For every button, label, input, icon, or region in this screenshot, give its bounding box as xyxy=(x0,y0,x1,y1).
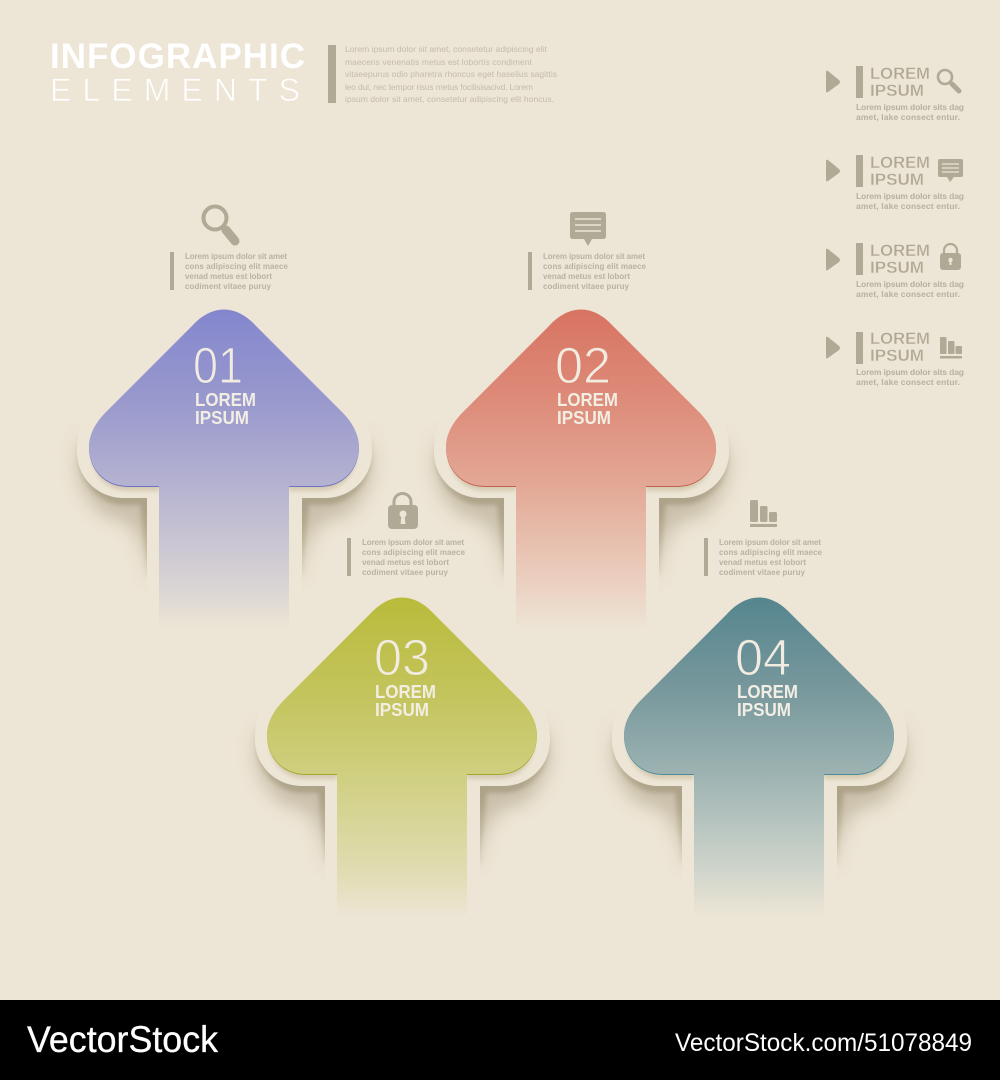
sidebar bar 2 xyxy=(856,155,863,187)
sidebar item 2 xyxy=(826,153,964,211)
arrow 03 label: LOREM xyxy=(375,682,436,702)
sidebar heading 4: LOREM xyxy=(870,329,930,348)
callout text 4: codiment vitaee puruy xyxy=(719,568,806,577)
intro paragraph: maecens venenatis metus est lobortis condiment xyxy=(345,57,533,67)
sidebar bar 4 xyxy=(856,332,863,364)
arrow 04 label: IPSUM xyxy=(737,700,791,720)
sidebar heading 2: LOREM xyxy=(870,153,930,172)
callout text 1: Lorem ipsum dolor sit amet xyxy=(185,252,287,261)
intro paragraph: ipsum dolor sit amet, consetetur adipiscing elit honcus. xyxy=(345,94,554,104)
callout text 3: codiment vitaee puruy xyxy=(362,568,449,577)
sidebar heading 2 xyxy=(870,153,930,189)
callout text 4: Lorem ipsum dolor sit amet xyxy=(719,538,821,547)
callout 2 xyxy=(528,212,647,291)
callout text 1: cons adipiscing elit maece xyxy=(185,262,289,271)
arrow 01 label: IPSUM xyxy=(195,408,249,428)
sidebar text 3: amet, lake consect entur. xyxy=(856,289,960,299)
callout text 1: venad metus est lobort xyxy=(185,272,272,281)
sidebar heading 4: IPSUM xyxy=(870,346,924,365)
intro paragraph: Lorem ipsum dolor sit amet, consetetur adipiscing elit xyxy=(345,44,548,54)
sidebar item 1 xyxy=(826,64,964,122)
callout text 4 xyxy=(719,538,823,577)
intro paragraph xyxy=(345,44,557,104)
sidebar heading 4 xyxy=(870,329,930,365)
arrow 02 label: IPSUM xyxy=(557,408,611,428)
title divider bar xyxy=(328,45,336,103)
sidebar text 1 xyxy=(856,102,964,122)
title: INFOGRAPHIC xyxy=(50,37,305,76)
sidebar text 1: Lorem ipsum dolor sits dag xyxy=(856,102,964,112)
callout 1 xyxy=(170,206,289,291)
intro paragraph: leo dui, nec tempor risus metus focilisisacivd. Lorem xyxy=(345,82,533,92)
callout text 1 xyxy=(185,252,289,291)
callout text 3: cons adipiscing elit maece xyxy=(362,548,466,557)
sidebar text 2 xyxy=(856,191,964,211)
callout text 4: venad metus est lobort xyxy=(719,558,806,567)
icon: padlock small xyxy=(940,244,961,270)
icon: speech bubble xyxy=(570,212,606,246)
arrow 02 label xyxy=(555,337,618,428)
arrow 03 label: IPSUM xyxy=(375,700,429,720)
arrow 02 label: 02 xyxy=(555,337,611,394)
sidebar item 3 xyxy=(826,241,964,299)
footer url: VectorStock.com/51078849 xyxy=(675,1029,972,1057)
callout text 2: codiment vitaee puruy xyxy=(543,282,630,291)
callout text 4: cons adipiscing elit maece xyxy=(719,548,823,557)
arrow 02 xyxy=(432,300,732,632)
sidebar pointer 1 xyxy=(826,71,840,92)
arrow 04 xyxy=(610,588,910,920)
icon: speech bubble small xyxy=(938,159,963,182)
callout text 3 xyxy=(362,538,466,577)
sidebar text 4: amet, lake consect entur. xyxy=(856,377,960,387)
sidebar text 2: amet, lake consect entur. xyxy=(856,201,960,211)
title xyxy=(50,37,305,108)
arrow 01 label: 01 xyxy=(193,337,243,394)
arrow 04 label: LOREM xyxy=(737,682,798,702)
sidebar heading 1: LOREM xyxy=(870,64,930,83)
callout 3 xyxy=(347,494,466,577)
callout text 2: Lorem ipsum dolor sit amet xyxy=(543,252,645,261)
sidebar text 2: Lorem ipsum dolor sits dag xyxy=(856,191,964,201)
footer band xyxy=(0,1000,1000,1080)
sidebar text 1: amet, lake consect entur. xyxy=(856,112,960,122)
intro paragraph: vitaeepurus odio pharetra rhoncus eget haselius sagittis xyxy=(345,69,557,79)
arrow 03 xyxy=(253,588,553,920)
title: ELEMENTS xyxy=(50,72,300,108)
icon: bar chart xyxy=(750,500,777,527)
arrow 04 label: 04 xyxy=(735,629,791,686)
arrow 01 xyxy=(75,300,375,632)
callout text 3: Lorem ipsum dolor sit amet xyxy=(362,538,464,547)
callout text 2 xyxy=(543,252,647,291)
sidebar text 3 xyxy=(856,279,964,299)
callout bar 3 xyxy=(347,538,351,576)
icon: magnifier xyxy=(204,206,235,241)
arrow 03 label xyxy=(374,629,436,720)
icon: bar chart small xyxy=(940,337,962,358)
arrow 01 label: LOREM xyxy=(195,390,256,410)
sidebar heading 1 xyxy=(870,64,930,100)
sidebar heading 3: LOREM xyxy=(870,241,930,260)
sidebar heading 3 xyxy=(870,241,930,277)
sidebar heading 3: IPSUM xyxy=(870,258,924,277)
callout text 1: codiment vitaee puruy xyxy=(185,282,272,291)
callout 4 xyxy=(704,500,823,577)
icon: magnifier small xyxy=(938,70,959,91)
sidebar text 4: Lorem ipsum dolor sits dag xyxy=(856,367,964,377)
arrow 03 label: 03 xyxy=(374,629,430,686)
sidebar item 4 xyxy=(826,329,964,387)
footer logo: VectorStock xyxy=(27,1019,218,1060)
sidebar heading 2: IPSUM xyxy=(870,170,924,189)
icon: padlock xyxy=(388,494,418,529)
arrow 01 label xyxy=(193,337,256,428)
sidebar text 3: Lorem ipsum dolor sits dag xyxy=(856,279,964,289)
arrow 04 label xyxy=(735,629,798,720)
sidebar bar 1 xyxy=(856,66,863,98)
arrow 02 label: LOREM xyxy=(557,390,618,410)
sidebar heading 1: IPSUM xyxy=(870,81,924,100)
sidebar pointer 4 xyxy=(826,337,840,358)
sidebar pointer 3 xyxy=(826,249,840,270)
callout bar 1 xyxy=(170,252,174,290)
callout bar 2 xyxy=(528,252,532,290)
callout bar 4 xyxy=(704,538,708,576)
sidebar pointer 2 xyxy=(826,160,840,181)
sidebar text 4 xyxy=(856,367,964,387)
callout text 2: cons adipiscing elit maece xyxy=(543,262,647,271)
callout text 3: venad metus est lobort xyxy=(362,558,449,567)
callout text 2: venad metus est lobort xyxy=(543,272,630,281)
sidebar bar 3 xyxy=(856,243,863,275)
